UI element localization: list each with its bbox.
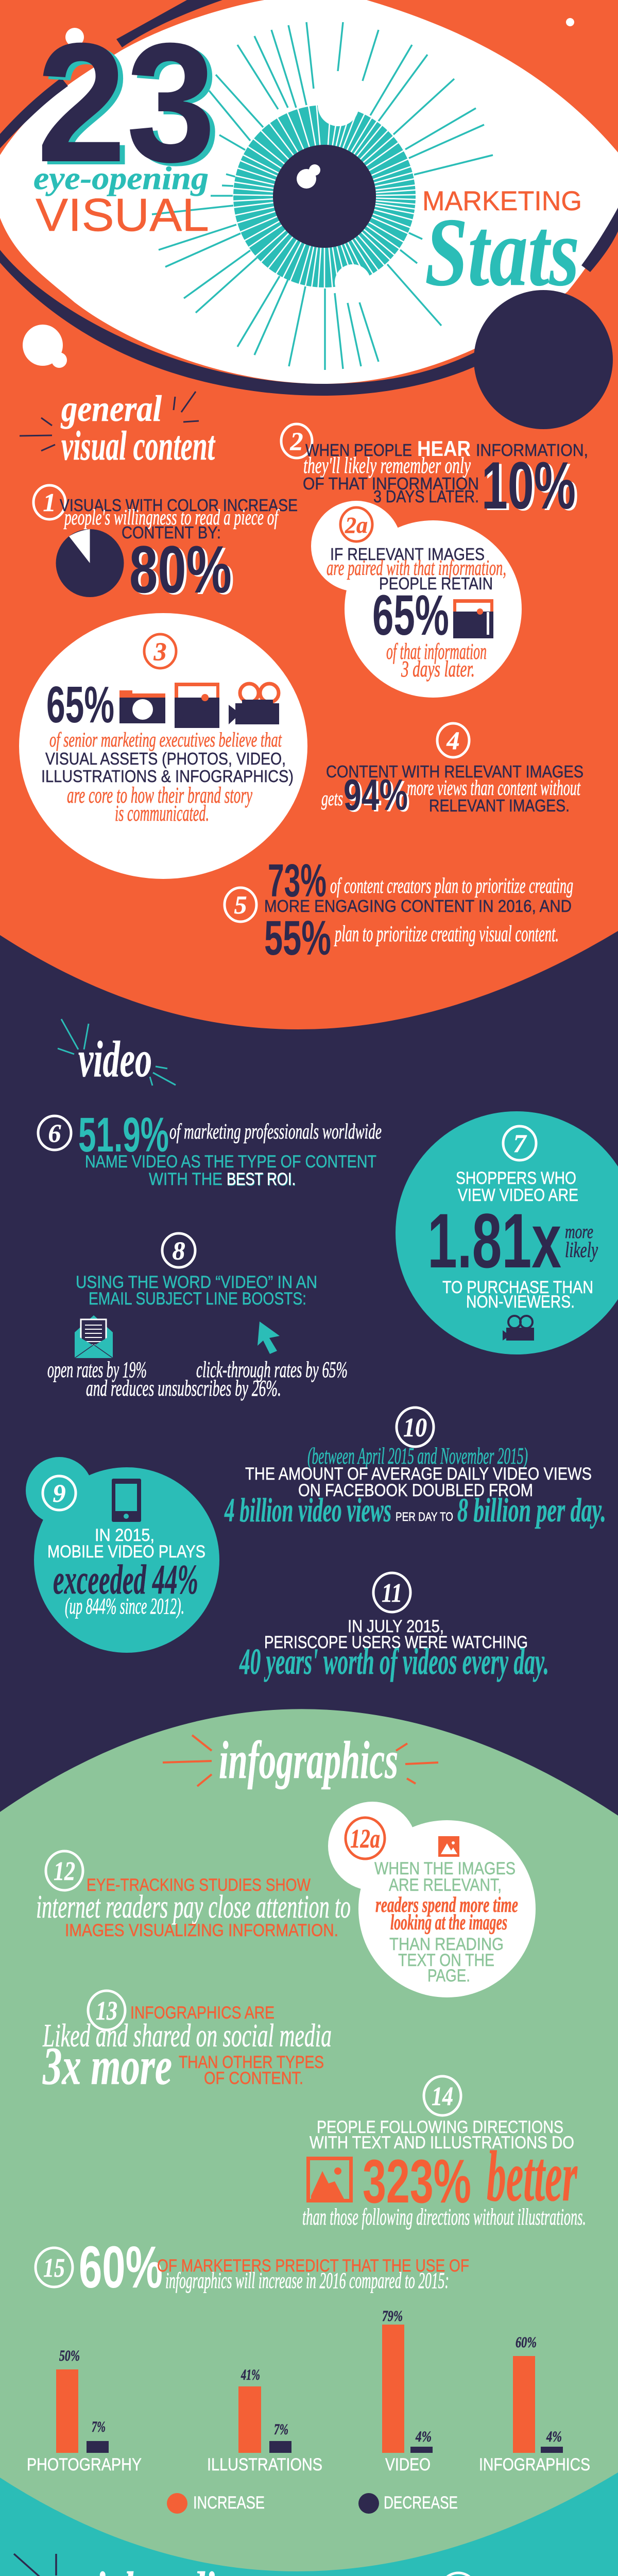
panel: stat 2a bubble (311, 501, 522, 698)
stat 15: marketer predictions (36, 2234, 469, 2300)
stat 5: content creators: 55% (264, 911, 331, 965)
stat 2: hearing retention: they'll likely remember only (303, 453, 471, 478)
stat 2: hearing retention: 2 (289, 427, 303, 455)
panel: stat 7 bubble: more (565, 1221, 593, 1243)
stat 6: best ROI: of marketing professionals worldwide (169, 1120, 382, 1144)
stat 5: content creators: 5 (234, 890, 247, 919)
stat 1: colour visuals: VISUALS WITH COLOR INCREASE (60, 496, 298, 515)
stat 4: relevant images: RELEVANT IMAGES. (429, 796, 570, 815)
panel: stat 12a bubble: readers spend more time (375, 1893, 518, 1917)
stat 6: best ROI: NAME VIDEO AS THE TYPE OF CONTENT (85, 1152, 376, 1172)
panel: stat 9 bubble (26, 1457, 219, 1653)
stat 14: directions with illustrations: WITH TEXT AND ILLUSTRATIONS DO (310, 2133, 574, 2153)
icon: picture (175, 683, 219, 728)
panel: stat 12a bubble: looking at the images (390, 1911, 507, 1935)
bar chart: 41% (241, 2366, 260, 2383)
hero eye illustration (0, 0, 618, 429)
stat 8: video in subject line: 8 (172, 1236, 185, 1265)
stat 2: hearing retention: OF THAT INFORMATION (303, 474, 479, 493)
panel: stat 2a bubble: IF RELEVANT IMAGES (330, 545, 485, 564)
stat 1: colour visuals: people's willingness to read a piece of (63, 506, 280, 530)
panel: stat 7 bubble: 1.81x (427, 1197, 561, 1284)
panel: stat 7 bubble: SHOPPERS WHO (456, 1168, 576, 1188)
bar chart: ILLUSTRATIONS (207, 2455, 322, 2475)
icon: phone (112, 1479, 141, 1522)
panel: stat 2a bubble: 3 days later. (401, 656, 475, 682)
title: 23 (37, 7, 216, 197)
heading: social media (14, 2554, 269, 2576)
panel: stat 2a bubble: 2a (345, 513, 368, 538)
stat 14: directions with illustrations: PEOPLE FOLLOWING DIRECTIONS (317, 2117, 563, 2137)
title (33, 7, 582, 307)
heading: general visual content: general (60, 388, 162, 429)
panel: stat 3 bubble: VISUAL ASSETS (PHOTOS, VIDEO, (45, 749, 286, 768)
stat 14: directions with illustrations: 323% (363, 2147, 471, 2216)
panel: stat 12a bubble: PAGE. (427, 1966, 470, 1986)
stat 12: eye tracking: 12 (54, 1857, 75, 1886)
stat 6: best ROI (38, 1108, 382, 1190)
panel: stat 7 bubble: VIEW VIDEO ARE (458, 1185, 578, 1205)
panel: stat 9 bubble: (up 844% since 2012). (65, 1594, 184, 1619)
panel: stat 7 bubble (396, 1111, 618, 1354)
stat 8: video in subject line (47, 1233, 348, 1401)
stat 12: eye tracking (36, 1851, 351, 1940)
icon: video camera (229, 684, 279, 724)
title: VISUAL (36, 190, 209, 241)
stat 5: content creators (225, 855, 573, 965)
bar chart: VIDEO (385, 2455, 431, 2475)
stat 10: facebook video views: 4 billion video views (224, 1492, 391, 1529)
stat 2: hearing retention: 3 DAYS LATER. (373, 487, 479, 506)
stat 1: colour visuals (33, 485, 298, 608)
stat 13: liked and shared (42, 1991, 332, 2096)
stat 4: relevant images: 94% (344, 771, 408, 820)
title: eye-opening (33, 160, 209, 196)
icon: picture (306, 2157, 353, 2202)
bar chart: 4% (546, 2428, 562, 2445)
panel: stat 12a bubble (328, 1802, 536, 1997)
stat 13: liked and shared: 13 (96, 1996, 117, 2026)
panel: stat 9 bubble: exceeded 44% (53, 1556, 198, 1603)
stat 4: relevant images: CONTENT WITH RELEVANT IMAGES (326, 762, 583, 781)
stat 15: marketer predictions: 15 (43, 2253, 65, 2283)
stat 6: best ROI: BEST ROI. (227, 1170, 296, 1190)
stat 4: relevant images: 94% (346, 772, 410, 821)
icon: picture (438, 1836, 459, 1857)
bar chart: 4% (415, 2428, 432, 2445)
stat 8: video in subject line: and reduces unsubscribes by 26%. (86, 1376, 281, 1401)
icon: video camera (503, 1316, 534, 1341)
panel: stat 2a bubble: of that information (386, 639, 487, 664)
stat 16: shared visual content (333, 2573, 589, 2576)
stat 12: eye tracking: IMAGES VISUALIZING INFORMATION. (65, 1921, 338, 1940)
stat 14: directions with illustrations (302, 2076, 586, 2230)
bar chart: PHOTOGRAPHY (27, 2455, 142, 2475)
icon: cursor (258, 1321, 280, 1354)
icon: camera (119, 690, 165, 723)
bar chart: 7% (92, 2418, 106, 2435)
stat 1: colour visuals: CONTENT BY: (122, 523, 221, 542)
panel: stat 3 bubble: of senior marketing executives believe that (49, 728, 282, 751)
heading: video: video (78, 1030, 152, 1088)
stat 6: best ROI: 6 (48, 1118, 61, 1147)
panel: stat 3 bubble (19, 613, 307, 879)
stat 6: best ROI: WITH THE (149, 1170, 222, 1189)
stat 2: hearing retention: 10% (484, 449, 578, 524)
stat 13: liked and shared: THAN OTHER TYPES (179, 2053, 324, 2072)
panel: stat 7 bubble: NON-VIEWERS. (466, 1292, 575, 1312)
stat 2: hearing retention: 10% (482, 448, 576, 523)
pie chart (56, 529, 124, 597)
stat 8: video in subject line: open rates by 19% (47, 1357, 147, 1382)
stat 1: colour visuals: 80% (129, 532, 232, 607)
bar chart: 60% (516, 2334, 537, 2351)
panel: stat 12a bubble: WHEN THE IMAGES (374, 1859, 516, 1878)
panel: stat 7 bubble: 7 (513, 1129, 527, 1158)
stat 2: hearing retention (281, 424, 588, 524)
title: Stats (425, 198, 579, 307)
panel: stat 12a bubble: THAN READING (389, 1935, 504, 1954)
title: 23 (42, 10, 221, 200)
heading: general visual content: visual content (61, 423, 216, 469)
stat 4: relevant images (321, 723, 583, 821)
stat 4: relevant images: gets (321, 787, 343, 810)
panel: stat 3 bubble: is communicated. (115, 801, 209, 826)
panel: stat 3 bubble: 3 (153, 637, 167, 666)
panel: stat 9 bubble: 9 (53, 1479, 66, 1507)
stat 5: content creators: 73% (268, 855, 327, 907)
panel: stat 2a bubble: 65% (372, 584, 449, 647)
panel: stat 7 bubble: likely (565, 1239, 598, 1262)
stat 14: directions with illustrations: 14 (432, 2082, 453, 2111)
heading: video (58, 1019, 176, 1088)
panel: stat 3 bubble: ILLUSTRATIONS & INFOGRAPHICS) (41, 767, 294, 786)
bar chart (27, 2308, 590, 2475)
icon: envelope (75, 1315, 113, 1358)
title: MARKETING (422, 186, 582, 216)
stat 13: liked and shared: OF CONTENT. (204, 2069, 303, 2088)
stat 10: facebook video views: 10 (403, 1413, 427, 1443)
stat 6: best ROI: 51.9% (78, 1108, 169, 1162)
stat 6: best ROI: BEST ROI. (227, 1170, 296, 1189)
stat 2: hearing retention: INFORMATION, (476, 440, 588, 460)
bar chart: 7% (274, 2421, 288, 2438)
bar chart: 79% (382, 2308, 403, 2325)
stat 5: content creators: MORE ENGAGING CONTENT IN 2016, AND (264, 896, 572, 916)
heading: infographics: infographics (219, 1731, 398, 1790)
stat 4: relevant images: 4 (446, 726, 459, 755)
stat 12: eye tracking: internet readers pay close attention to (36, 1888, 351, 1925)
stat 11: periscope (239, 1573, 549, 1682)
heading: general visual content (20, 388, 216, 469)
stat 8: video in subject line: click-through rates by 65% (196, 1357, 348, 1382)
bar chart: INFOGRAPHICS (479, 2455, 590, 2475)
bar chart: 50% (59, 2347, 80, 2364)
stat 13: liked and shared: 3x more (42, 2037, 172, 2096)
stat 15: marketer predictions: 60% (79, 2234, 163, 2300)
panel: stat 2a bubble: are paired with that information, (327, 556, 506, 580)
stat 11: periscope: IN JULY 2015, (348, 1617, 444, 1636)
panel: stat 9 bubble: IN 2015, (95, 1526, 154, 1545)
stat 2: hearing retention: HEAR (417, 436, 471, 461)
stat 1: colour visuals: 80% (132, 533, 234, 608)
stat 13: liked and shared: INFOGRAPHICS ARE (130, 2003, 274, 2023)
panel: stat 12a bubble: ARE RELEVANT, (389, 1875, 502, 1895)
panel: stat 7 bubble: TO PURCHASE THAN (442, 1278, 593, 1297)
heading: infographics (163, 1731, 438, 1790)
stat 1: colour visuals: 1 (43, 488, 56, 517)
panel: stat 12a bubble: TEXT ON THE (398, 1951, 494, 1970)
stat 15: marketer predictions: OF MARKETERS PREDICT THAT THE USE OF (157, 2256, 469, 2276)
panel: stat 3 bubble: 65% (46, 676, 114, 734)
stat 2: hearing retention: WHEN PEOPLE (305, 440, 412, 460)
chart legend: INCREASE (193, 2493, 265, 2513)
panel: stat 12a bubble: 12a (350, 1824, 380, 1854)
stat 8: video in subject line: USING THE WORD “VIDEO” IN AN (76, 1273, 317, 1292)
stat 10: facebook video views (224, 1408, 606, 1529)
chart legend: DECREASE (384, 2493, 458, 2513)
stat 13: liked and shared: Liked and shared on social media (42, 2017, 332, 2054)
panel: stat 3 bubble: are core to how their brand story (67, 783, 252, 808)
stat 11: periscope: PERISCOPE USERS WERE WATCHING (264, 1633, 528, 1652)
stat 8: video in subject line: EMAIL SUBJECT LINE BOOSTS: (89, 1289, 306, 1309)
stat 10: facebook video views: ON FACEBOOK DOUBLED FROM (298, 1481, 533, 1500)
panel: stat 9 bubble: MOBILE VIDEO PLAYS (47, 1542, 205, 1562)
stat 12: eye tracking: EYE-TRACKING STUDIES SHOW (87, 1875, 311, 1895)
chart legend (167, 2493, 458, 2514)
stat 10: facebook video views: PER DAY TO (396, 1510, 453, 1524)
stat 11: periscope: 11 (382, 1579, 402, 1608)
panel: stat 2a bubble: PEOPLE RETAIN (379, 574, 493, 593)
icon: picture (453, 599, 493, 638)
